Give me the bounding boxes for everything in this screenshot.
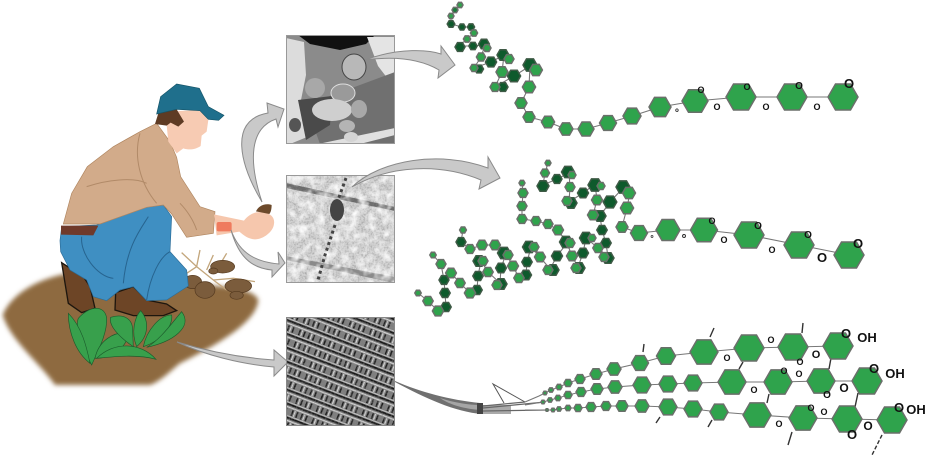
callose coiled chain: O — [754, 221, 762, 232]
callose coiled chain: o — [682, 233, 686, 240]
cellulose parallel chains: O — [775, 419, 783, 429]
amylose chain (starch): O — [697, 85, 705, 95]
front boot — [115, 287, 177, 316]
amylose chain (starch): O — [795, 81, 803, 92]
cellulose parallel chains: O — [820, 407, 828, 417]
rear boot — [62, 263, 95, 313]
forearm and hand — [214, 212, 274, 239]
tapered cellulose fiber — [395, 381, 548, 414]
cellulose parallel chains: O — [869, 361, 879, 376]
callose coiled chain: O — [708, 216, 716, 226]
photo: cellulose microfibrils — [286, 318, 394, 426]
cellulose parallel chains: O — [795, 369, 803, 379]
cellulose parallel chains: O — [807, 403, 815, 413]
arrow: starch photo to amylose chain — [365, 46, 455, 78]
cellulose parallel chains: O — [863, 419, 873, 433]
cellulose parallel chains: O — [750, 385, 758, 395]
callose coiled chain: o — [650, 234, 654, 240]
cellulose parallel chains: OH — [885, 366, 905, 381]
cellulose parallel chains: O — [823, 390, 831, 401]
cellulose parallel chains: OH — [906, 402, 926, 417]
amylose chain (starch): O — [743, 82, 751, 92]
cellulose parallel chains: O — [847, 427, 857, 442]
soil mound — [3, 274, 258, 385]
cellulose parallel chains: OH — [857, 330, 877, 345]
callose coiled chain: O — [768, 245, 776, 255]
arrow: potato to starch granule photo — [242, 103, 284, 202]
amylose chain (starch) — [447, 2, 858, 136]
face and neck — [167, 110, 208, 153]
amylose chain (starch): O — [713, 102, 721, 112]
infected lesion on arm — [217, 222, 232, 231]
photo: starch granules — [286, 35, 395, 144]
cellulose parallel chains: O — [767, 335, 775, 345]
cellulose parallel chains: O — [812, 349, 821, 361]
arrow: callose photo to callose coil — [352, 157, 500, 189]
callose coiled chain: O — [817, 250, 827, 265]
cellulose parallel chains: O — [780, 366, 788, 376]
roots — [182, 250, 255, 290]
cellulose parallel chains: O — [839, 381, 849, 395]
amylose chain (starch): O — [844, 76, 854, 91]
cellulose parallel chains: O — [894, 400, 904, 415]
tan shirt — [63, 123, 215, 237]
blue jeans — [60, 205, 188, 301]
photo: callose in phloem — [286, 175, 395, 283]
cellulose parallel chains: O — [841, 326, 851, 341]
farmer illustration — [3, 84, 274, 385]
arrow: leaves to cellulose photo — [177, 342, 288, 376]
callose coiled chain: O — [804, 230, 812, 241]
cellulose parallel chains — [525, 323, 926, 455]
leaves — [68, 308, 185, 365]
potato in hand — [256, 204, 272, 214]
hair — [155, 109, 184, 127]
cap — [157, 84, 224, 120]
callose coiled chain — [415, 160, 864, 316]
callose coiled chain: O — [720, 235, 728, 245]
cellulose parallel chains: O — [723, 353, 731, 363]
cellulose parallel chains: O — [796, 357, 804, 367]
belt — [61, 226, 98, 235]
amylose chain (starch): O — [813, 102, 821, 112]
arrow: arm to phloem photo — [231, 230, 285, 277]
amylose chain (starch): O — [762, 102, 770, 112]
amylose chain (starch): o — [675, 108, 679, 114]
potatoes — [184, 260, 252, 299]
callose coiled chain: O — [853, 236, 863, 251]
